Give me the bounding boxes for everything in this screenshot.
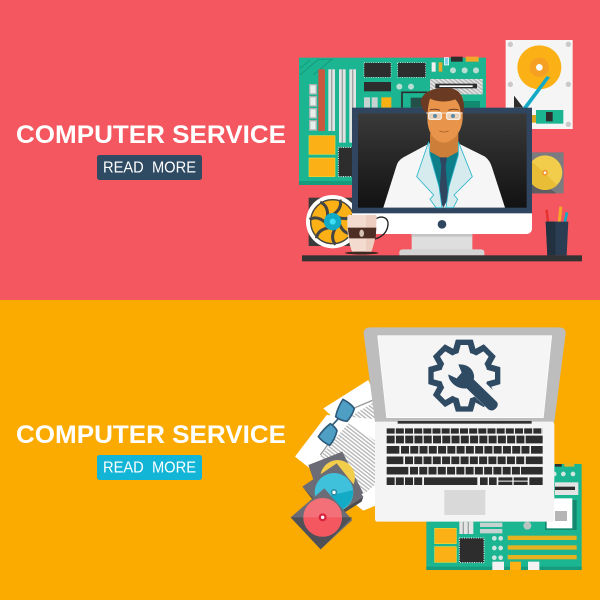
icon: glasses: [318, 399, 373, 455]
button: read more dark: READ MORE: [103, 160, 196, 176]
icon: red disc case: [291, 488, 352, 549]
figure: technician: [383, 88, 505, 208]
icon: gear and wrench: [429, 340, 503, 412]
icon: pen holder: [545, 207, 568, 255]
button: read more cyan: [97, 455, 202, 480]
icon: hard disk drive: [506, 40, 573, 129]
panel: top banner: [0, 0, 600, 300]
icon: laptop: [364, 327, 566, 522]
icon: yellow disc case: [308, 452, 363, 508]
icon: motherboard: [299, 57, 486, 185]
icon: teal disc case: [302, 463, 363, 522]
trackpad: [444, 490, 485, 515]
button: read more dark: [97, 155, 202, 180]
icon: coffee cup: [345, 215, 388, 254]
illustration: computer desk scene: [299, 40, 582, 261]
keyboard: [387, 431, 543, 483]
heading: top: COMPUTER SERVICE: [16, 121, 286, 149]
icon: papers: [295, 380, 385, 511]
illustration: laptop workspace: [291, 327, 582, 570]
panel: bottom banner: [0, 300, 600, 600]
button: read more cyan: READ MORE: [103, 460, 196, 476]
icon: circuit board: [426, 463, 582, 570]
heading: bottom: COMPUTER SERVICE: [16, 421, 286, 449]
icon: cooling fan: [306, 195, 359, 248]
desk: [302, 255, 582, 261]
icon: desktop monitor: [352, 108, 532, 255]
icon: yellow disc: [528, 152, 564, 193]
